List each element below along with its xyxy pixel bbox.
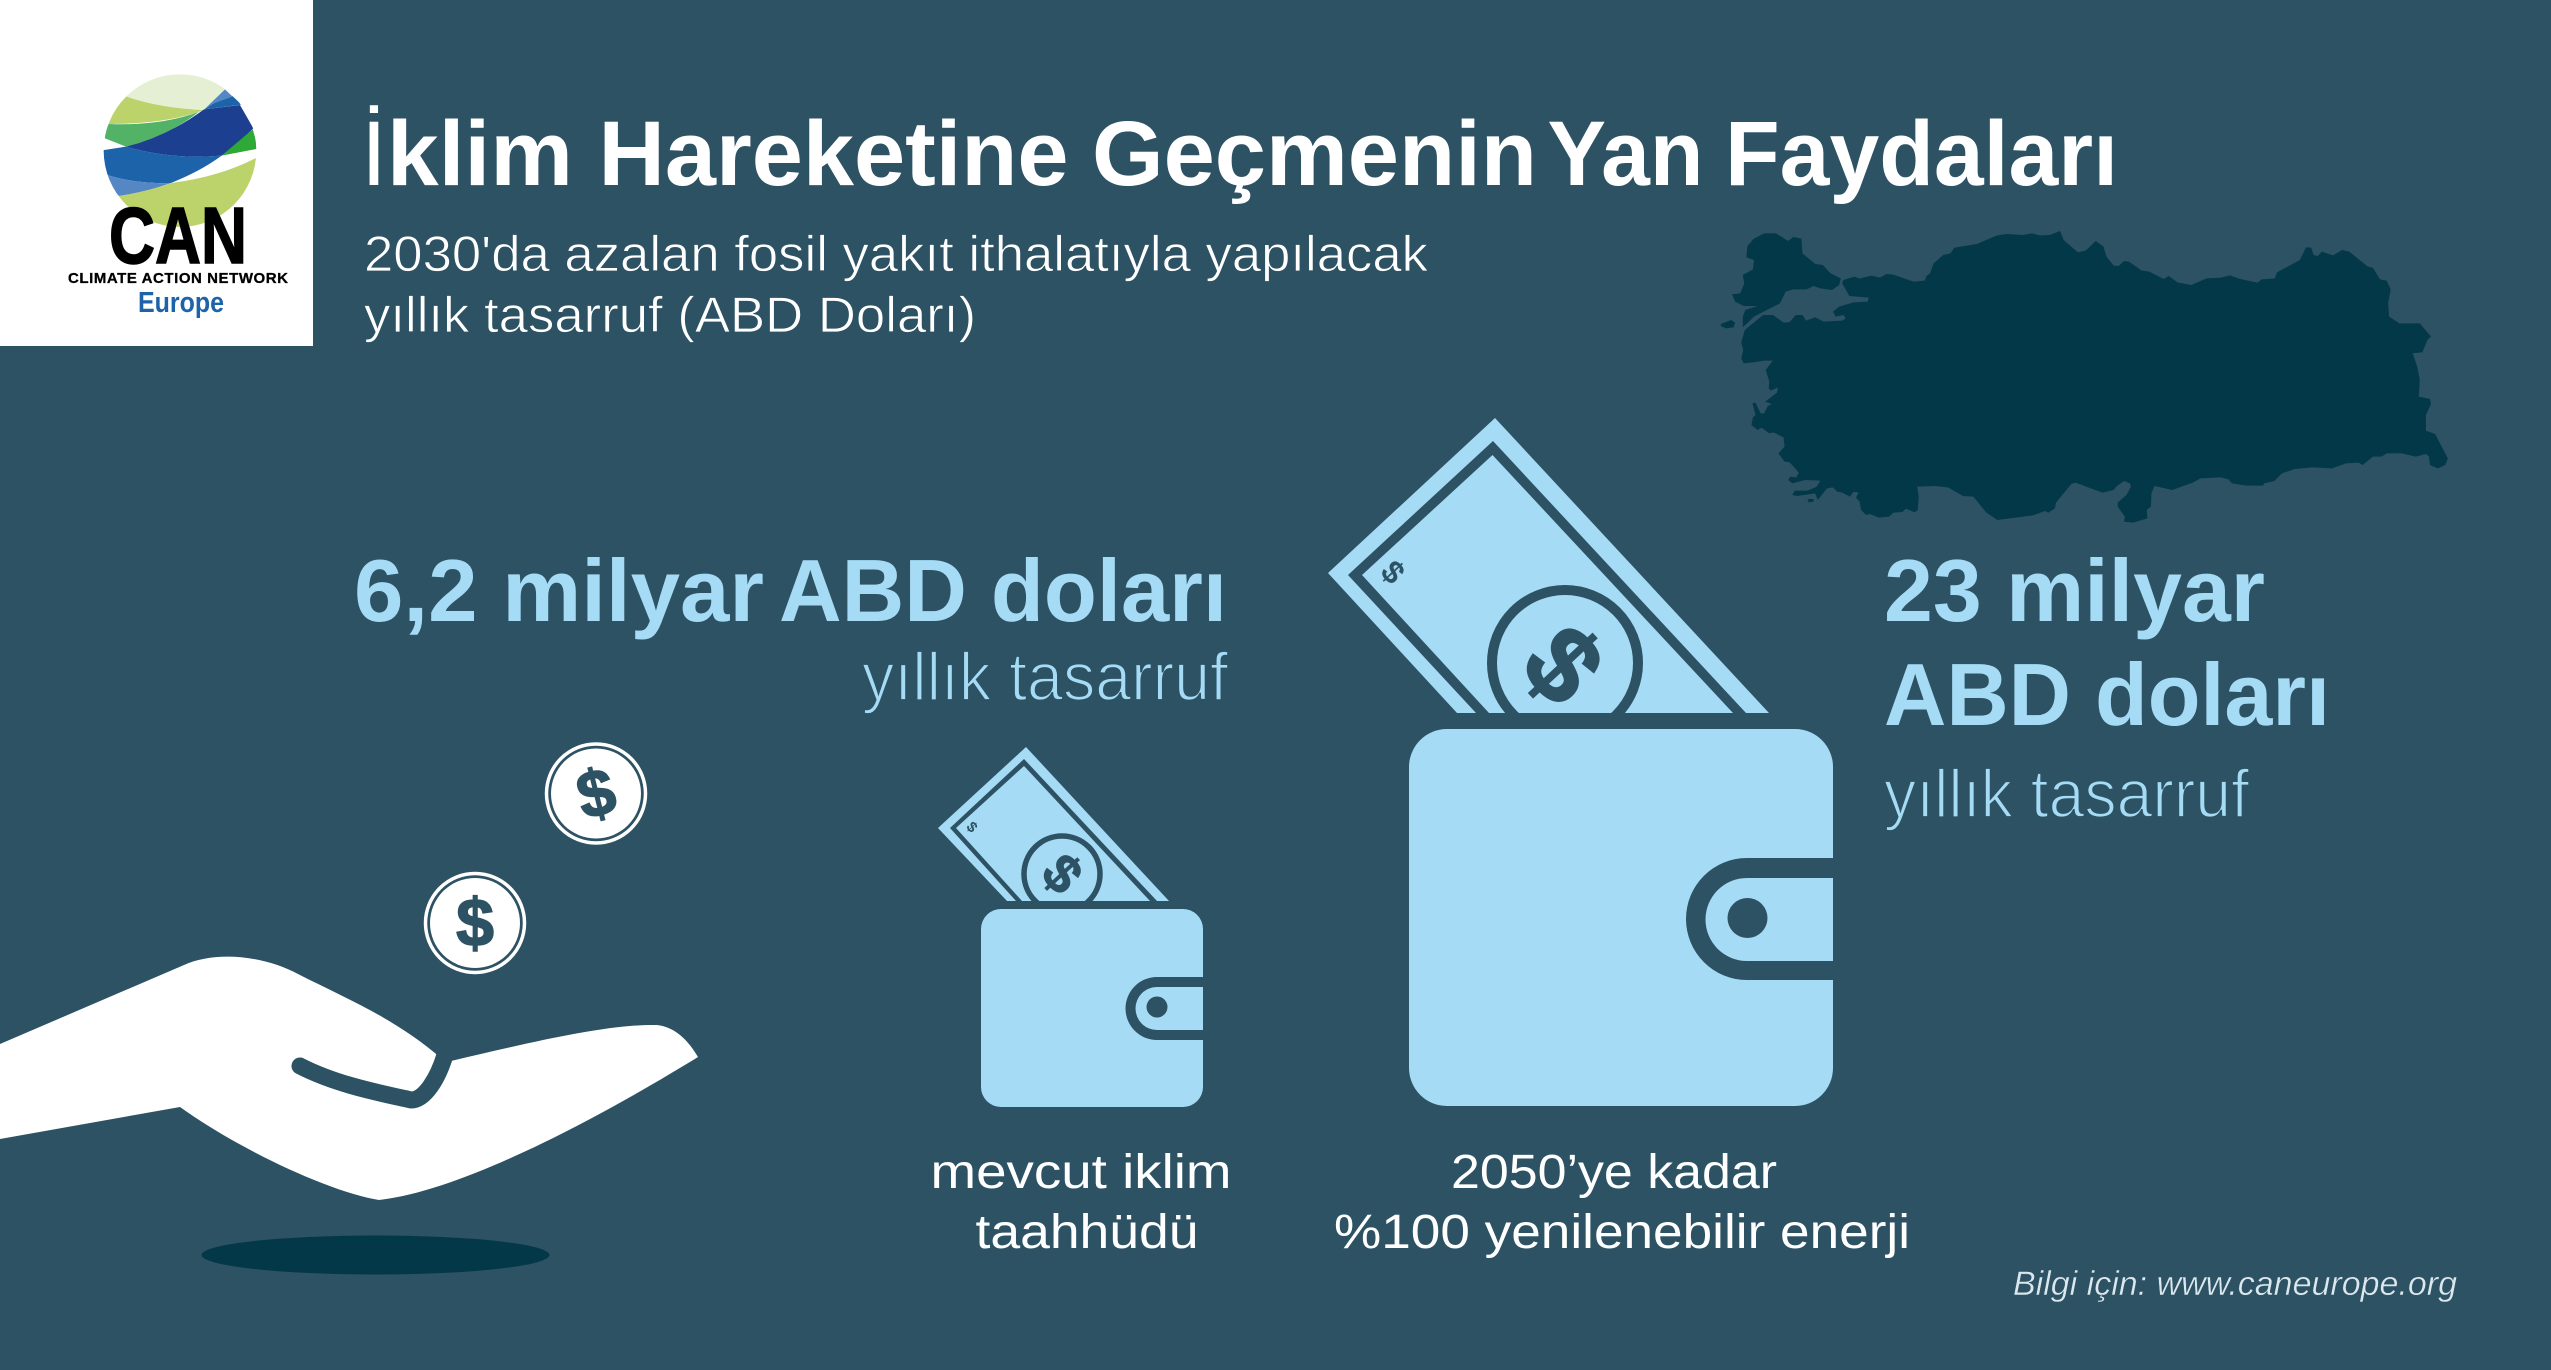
title	[361, 103, 2118, 205]
title: Faydaları	[1725, 103, 2118, 205]
banknote	[938, 747, 1169, 912]
title: İklim	[361, 103, 573, 205]
figure: 6,2 milyar ABD doları: ABD doları	[779, 541, 1227, 640]
label: yıllık tasarruf (right): yıllık tasarruf	[1884, 756, 2249, 832]
hand shadow	[202, 1236, 550, 1274]
title: Yan	[1548, 103, 1704, 205]
logo wordmark: CAN: CAN	[109, 191, 247, 280]
icon: lower coin	[426, 874, 524, 972]
subtitle	[364, 226, 1429, 343]
banknote: $	[1374, 553, 1412, 591]
caption: 2050'ye kadar %100 yenilenebilir enerji: %100 yenilenebilir enerji	[1334, 1206, 1910, 1259]
caption: mevcut iklim taahhüdü: taahhüdü	[976, 1206, 1198, 1259]
figure: 6,2 milyar ABD doları	[354, 541, 1227, 640]
logo text: Climate Action Network: CLIMATE ACTION NETWORK	[68, 270, 288, 287]
icon: open hand	[0, 957, 698, 1200]
caption: 2050'ye kadar %100 yenilenebilir enerji	[1334, 1146, 1910, 1259]
map: Turkey silhouette	[1721, 231, 2448, 523]
icon: upper coin	[546, 744, 646, 843]
source note: Bilgi için: www.caneurope.org	[2013, 1265, 2457, 1303]
figure: 23 milyar ABD doları	[1884, 541, 2330, 744]
banknote: $	[963, 818, 981, 837]
icon: upper coin: $	[569, 753, 623, 833]
icon: CAN globe	[104, 74, 256, 227]
title: Geçmenin	[1092, 103, 1537, 205]
figure: 23 milyar ABD doları: 23 milyar	[1884, 541, 2265, 640]
caption: mevcut iklim taahhüdü: mevcut iklim	[930, 1146, 1232, 1199]
banknote: $	[1500, 603, 1626, 727]
logo panel: CAN Europe	[0, 0, 313, 346]
banknote	[1328, 418, 1769, 736]
icon: large wallet with banknote	[1328, 418, 1833, 1106]
subtitle: 2030'da azalan fosil yakıt ithalatıyla yapılacak	[364, 226, 1429, 282]
wallet body	[981, 909, 1203, 1107]
wallet body	[1409, 729, 1833, 1106]
subtitle: yıllık tasarruf (ABD Doları)	[364, 287, 976, 343]
label: yıllık tasarruf (left): yıllık tasarruf	[862, 639, 1228, 715]
figure: 6,2 milyar ABD doları: 6,2 milyar	[354, 541, 764, 640]
banknote: $	[1030, 843, 1094, 905]
logo text: Europe: Europe	[138, 287, 224, 319]
icon: lower coin: $	[456, 885, 494, 961]
title: Hareketine	[598, 103, 1068, 205]
figure: 23 milyar ABD doları: ABD doları	[1884, 645, 2330, 744]
caption: mevcut iklim taahhüdü	[930, 1146, 1232, 1259]
icon: small wallet with banknote	[938, 747, 1203, 1107]
caption: 2050'ye kadar %100 yenilenebilir enerji: 2050’ye kadar	[1451, 1146, 1777, 1199]
